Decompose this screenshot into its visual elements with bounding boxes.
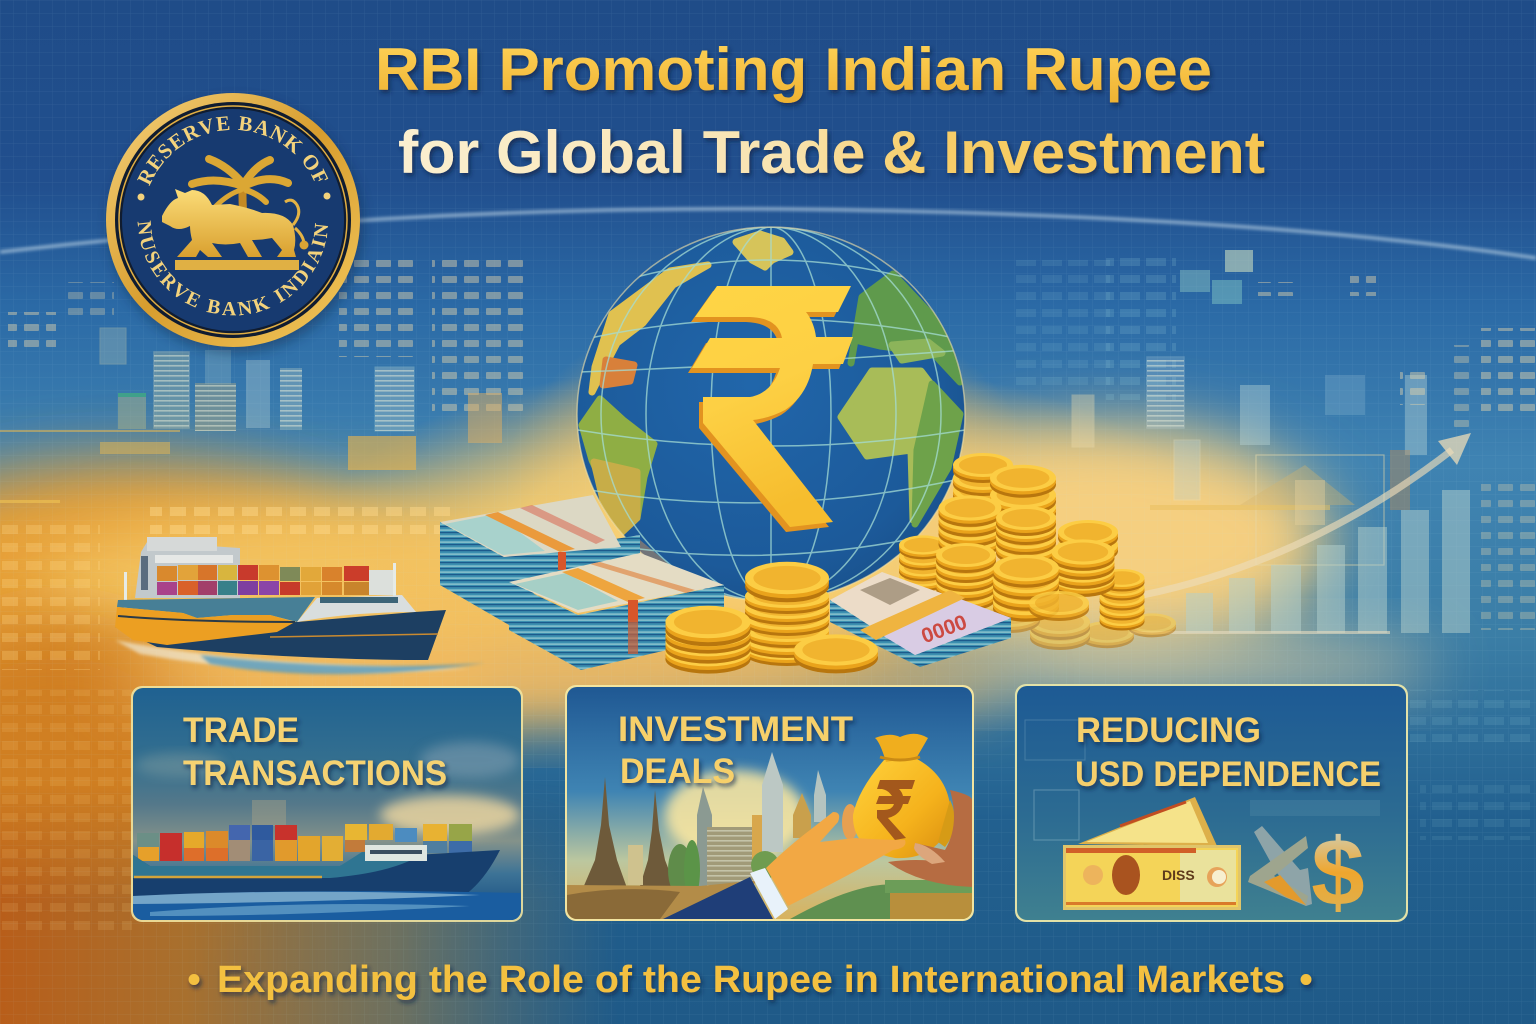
land masses bbox=[582, 234, 960, 600]
RBI seal bbox=[104, 93, 368, 358]
icon: dollar sign: $ bbox=[1311, 819, 1365, 926]
chart arrow right bbox=[1130, 433, 1471, 634]
title bbox=[375, 36, 1265, 186]
label: investment deals: DEALS bbox=[620, 752, 735, 791]
superstructure bbox=[135, 537, 240, 598]
background skyline bbox=[0, 250, 1536, 930]
panel: trade transactions bbox=[131, 686, 523, 922]
money stacks left bbox=[440, 495, 724, 670]
title: RBI Promoting Indian Rupee bbox=[375, 36, 1212, 103]
label: reducing usd dependence: USD DEPENDENCE bbox=[1075, 755, 1381, 794]
icon: crossed out mark bbox=[1248, 826, 1312, 906]
label: trade transactions: TRADE bbox=[183, 711, 299, 750]
footer tagline: Expanding the Role of the Rupee in International Markets bbox=[217, 959, 1285, 1001]
panel: reducing usd dependence bbox=[1015, 684, 1408, 926]
money stack right bbox=[830, 572, 1011, 667]
label: reducing usd dependence bbox=[1075, 711, 1381, 794]
label: investment deals: INVESTMENT bbox=[618, 710, 853, 749]
hull bbox=[115, 610, 446, 660]
label: investment deals bbox=[618, 710, 853, 791]
RBI seal: NUSERVE BANK INDIAIN bbox=[138, 220, 328, 316]
icon: lion bbox=[162, 189, 308, 257]
footer tagline: • bbox=[187, 959, 201, 1001]
RBI seal: RESERVE BANK OF bbox=[137, 116, 328, 186]
footer tagline: • bbox=[1299, 959, 1313, 1001]
horizon arc bbox=[0, 209, 1536, 258]
title: for Global Trade & Investment bbox=[398, 119, 1265, 186]
skyline buildings bbox=[628, 752, 826, 900]
icon: container ship bbox=[133, 824, 521, 920]
icon: palm tree bbox=[192, 159, 288, 210]
globe bbox=[577, 227, 965, 601]
coin stacks centre bbox=[665, 562, 878, 674]
money stack right: 0000 bbox=[918, 611, 970, 648]
label: trade transactions bbox=[183, 711, 447, 793]
icon: paris towers bbox=[583, 777, 675, 888]
icon: hands and money bag bbox=[663, 734, 972, 919]
label: reducing usd dependence: REDUCING bbox=[1076, 711, 1261, 750]
globe grid bbox=[578, 227, 965, 601]
ship bbox=[115, 537, 485, 674]
icon: banknotes bbox=[1063, 797, 1241, 910]
coin pile right bbox=[899, 453, 1176, 650]
containers bbox=[157, 565, 369, 595]
globe glow bbox=[505, 300, 1035, 660]
icon: banknotes: DISS bbox=[1162, 867, 1195, 883]
panel: investment deals bbox=[565, 685, 974, 921]
icon: rupee symbol bbox=[688, 286, 853, 532]
label: trade transactions: TRANSACTIONS bbox=[183, 754, 447, 793]
